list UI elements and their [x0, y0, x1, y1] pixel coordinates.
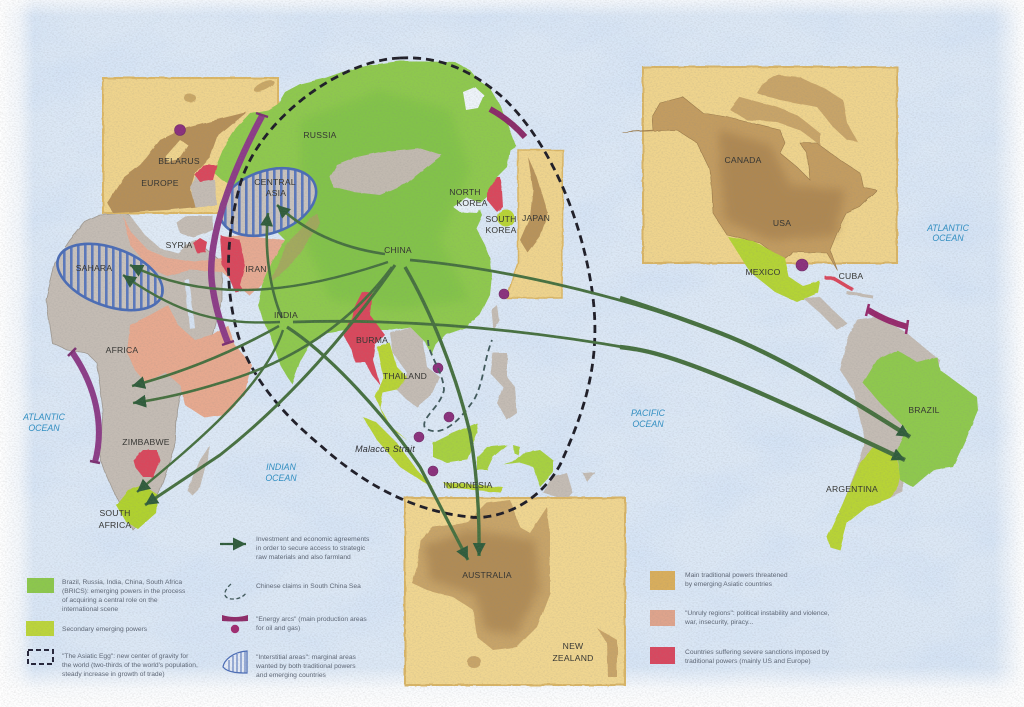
legend: right column [650, 571, 830, 665]
country labels: MEXICO [745, 267, 781, 277]
swatch: unruly regions [650, 610, 675, 626]
panel: North America box [622, 67, 897, 270]
text: investment: Investment and economic agreements [256, 536, 370, 543]
interstitial area: Central Asia [218, 166, 318, 238]
text: BRICS: international scene [62, 606, 118, 613]
text: traditional powers [685, 572, 788, 588]
country labels: CANADA [724, 155, 762, 165]
text: energy arcs [256, 616, 367, 632]
text: BRICS: Brazil, Russia, India, China, South Africa [62, 579, 182, 586]
text: energy arcs: "Energy arcs" (main production areas [256, 616, 367, 623]
country labels: NORTH [449, 187, 481, 197]
panel: Latin America [728, 237, 978, 550]
ocean labels [22, 223, 970, 483]
swatch: traditional powers [650, 571, 675, 590]
text: chinese claims: Chinese claims in South China Sea [256, 583, 361, 590]
text: investment: in order to secure access to strategic [256, 545, 366, 552]
text: unruly regions: war, insecurity, piracy... [684, 619, 754, 626]
country labels: CUBA [839, 271, 863, 281]
legend: left column [26, 578, 198, 678]
text: unruly regions [684, 610, 830, 626]
panel: countries under sanctions [133, 165, 853, 477]
text: Asiatic Egg [62, 653, 198, 678]
country labels: BRAZIL [908, 405, 940, 415]
country labels: EUROPE [141, 178, 179, 188]
text: interstitial areas: and emerging countries [256, 672, 327, 679]
ocean labels: ATLANTIC [926, 223, 970, 233]
text: energy arcs: for oil and gas) [256, 625, 300, 632]
panel: Europe box [103, 78, 278, 213]
text: interstitial areas [255, 654, 357, 679]
country labels: CENTRAL [254, 177, 296, 187]
panel: South Africa [116, 485, 158, 529]
investment arrows [123, 205, 910, 560]
text: sanctions: traditional powers (mainly US and Europe) [685, 658, 811, 665]
text: unruly regions: "Unruly regions": political instability and violence, [685, 610, 830, 617]
country labels: BELARUS [158, 156, 200, 166]
country labels: BURMA [356, 335, 388, 345]
country labels: SAHARA [76, 263, 112, 273]
text: Asiatic Egg: the world (two-thirds of the world's population, [62, 662, 198, 669]
country labels: RUSSIA [303, 130, 337, 140]
country labels: ARGENTINA [826, 484, 878, 494]
swatch: sanctions [650, 647, 675, 664]
icon: investment arrow [220, 543, 246, 545]
text: sanctions [685, 649, 830, 665]
country labels: ASIA [266, 188, 286, 198]
energy production dots [174, 124, 808, 476]
energy arcs [68, 109, 908, 463]
swatch: Asiatic Egg [28, 650, 53, 664]
legend: middle column [220, 536, 370, 679]
swatch: BRICS green [27, 578, 54, 593]
panel: Japan box [507, 150, 563, 298]
ocean labels: OCEAN [932, 233, 964, 243]
country labels: IRAN [245, 264, 267, 274]
ocean labels: OCEAN [265, 473, 297, 483]
ocean labels: ATLANTIC [22, 412, 66, 422]
country labels: INDIA [274, 310, 298, 320]
country labels: NEW [563, 641, 584, 651]
panel: Africa and Middle East [46, 213, 285, 530]
text: Asiatic Egg: "The Asiatic Egg": new center of gravity for [62, 653, 189, 660]
ocean labels: INDIAN [266, 462, 297, 472]
country labels: KOREA [456, 198, 488, 208]
text: interstitial areas: wanted by both traditional powers [255, 663, 356, 670]
country labels: Malacca Strait [355, 444, 415, 454]
country labels: ZIMBABWE [122, 437, 170, 447]
country labels: CHINA [384, 245, 412, 255]
country labels: KOREA [485, 225, 517, 235]
country labels: SOUTH [485, 214, 517, 224]
icon: chinese claims [225, 584, 247, 599]
country labels: AFRICA [106, 345, 138, 355]
text: investment: raw materials and also farmland [256, 554, 351, 561]
ocean labels: OCEAN [28, 423, 60, 433]
country labels: THAILAND [383, 371, 427, 381]
country labels: JAPAN [522, 213, 550, 223]
text: traditional powers: Main traditional powers threatened [685, 572, 788, 579]
panel: secondary emerging Asia [363, 210, 553, 492]
text: investment [256, 536, 370, 561]
country labels: USA [773, 218, 791, 228]
country labels: SYRIA [166, 240, 192, 250]
text: BRICS: (BRICS): emerging powers in the process [62, 588, 186, 595]
country labels: AFRICA [99, 520, 131, 530]
country labels: AUSTRALIA [462, 570, 512, 580]
ocean labels: OCEAN [632, 419, 664, 429]
icon: interstitial hatch [223, 651, 247, 673]
ocean labels: PACIFIC [631, 408, 666, 418]
swatch: secondary emerging powers [26, 621, 54, 636]
country labels: SOUTH [99, 508, 131, 518]
interstitial area: Sahara [56, 242, 164, 312]
country labels [76, 130, 940, 663]
Asiatic Egg dashed outline [228, 58, 595, 517]
text: BRICS [62, 579, 186, 613]
text: Asiatic Egg: steady increase in growth of trade) [62, 671, 165, 678]
text: sanctions: Countries suffering severe sanctions imposed by [685, 649, 830, 656]
Chinese claims in South China Sea [424, 340, 492, 431]
icon: energy arc and dot [222, 615, 248, 633]
text: interstitial areas: "Interstitial areas": marginal areas [256, 654, 357, 661]
country labels: INDONESIA [443, 480, 493, 490]
text: traditional powers: by emerging Asiatic countries [685, 581, 773, 588]
panel: Australia box [405, 498, 625, 685]
text: BRICS: of acquiring a central role on the [62, 597, 158, 604]
text: secondary emerging powers: Secondary emerging powers [62, 626, 148, 633]
panel: Asia emerging powers [213, 61, 595, 500]
country labels: ZEALAND [552, 653, 594, 663]
